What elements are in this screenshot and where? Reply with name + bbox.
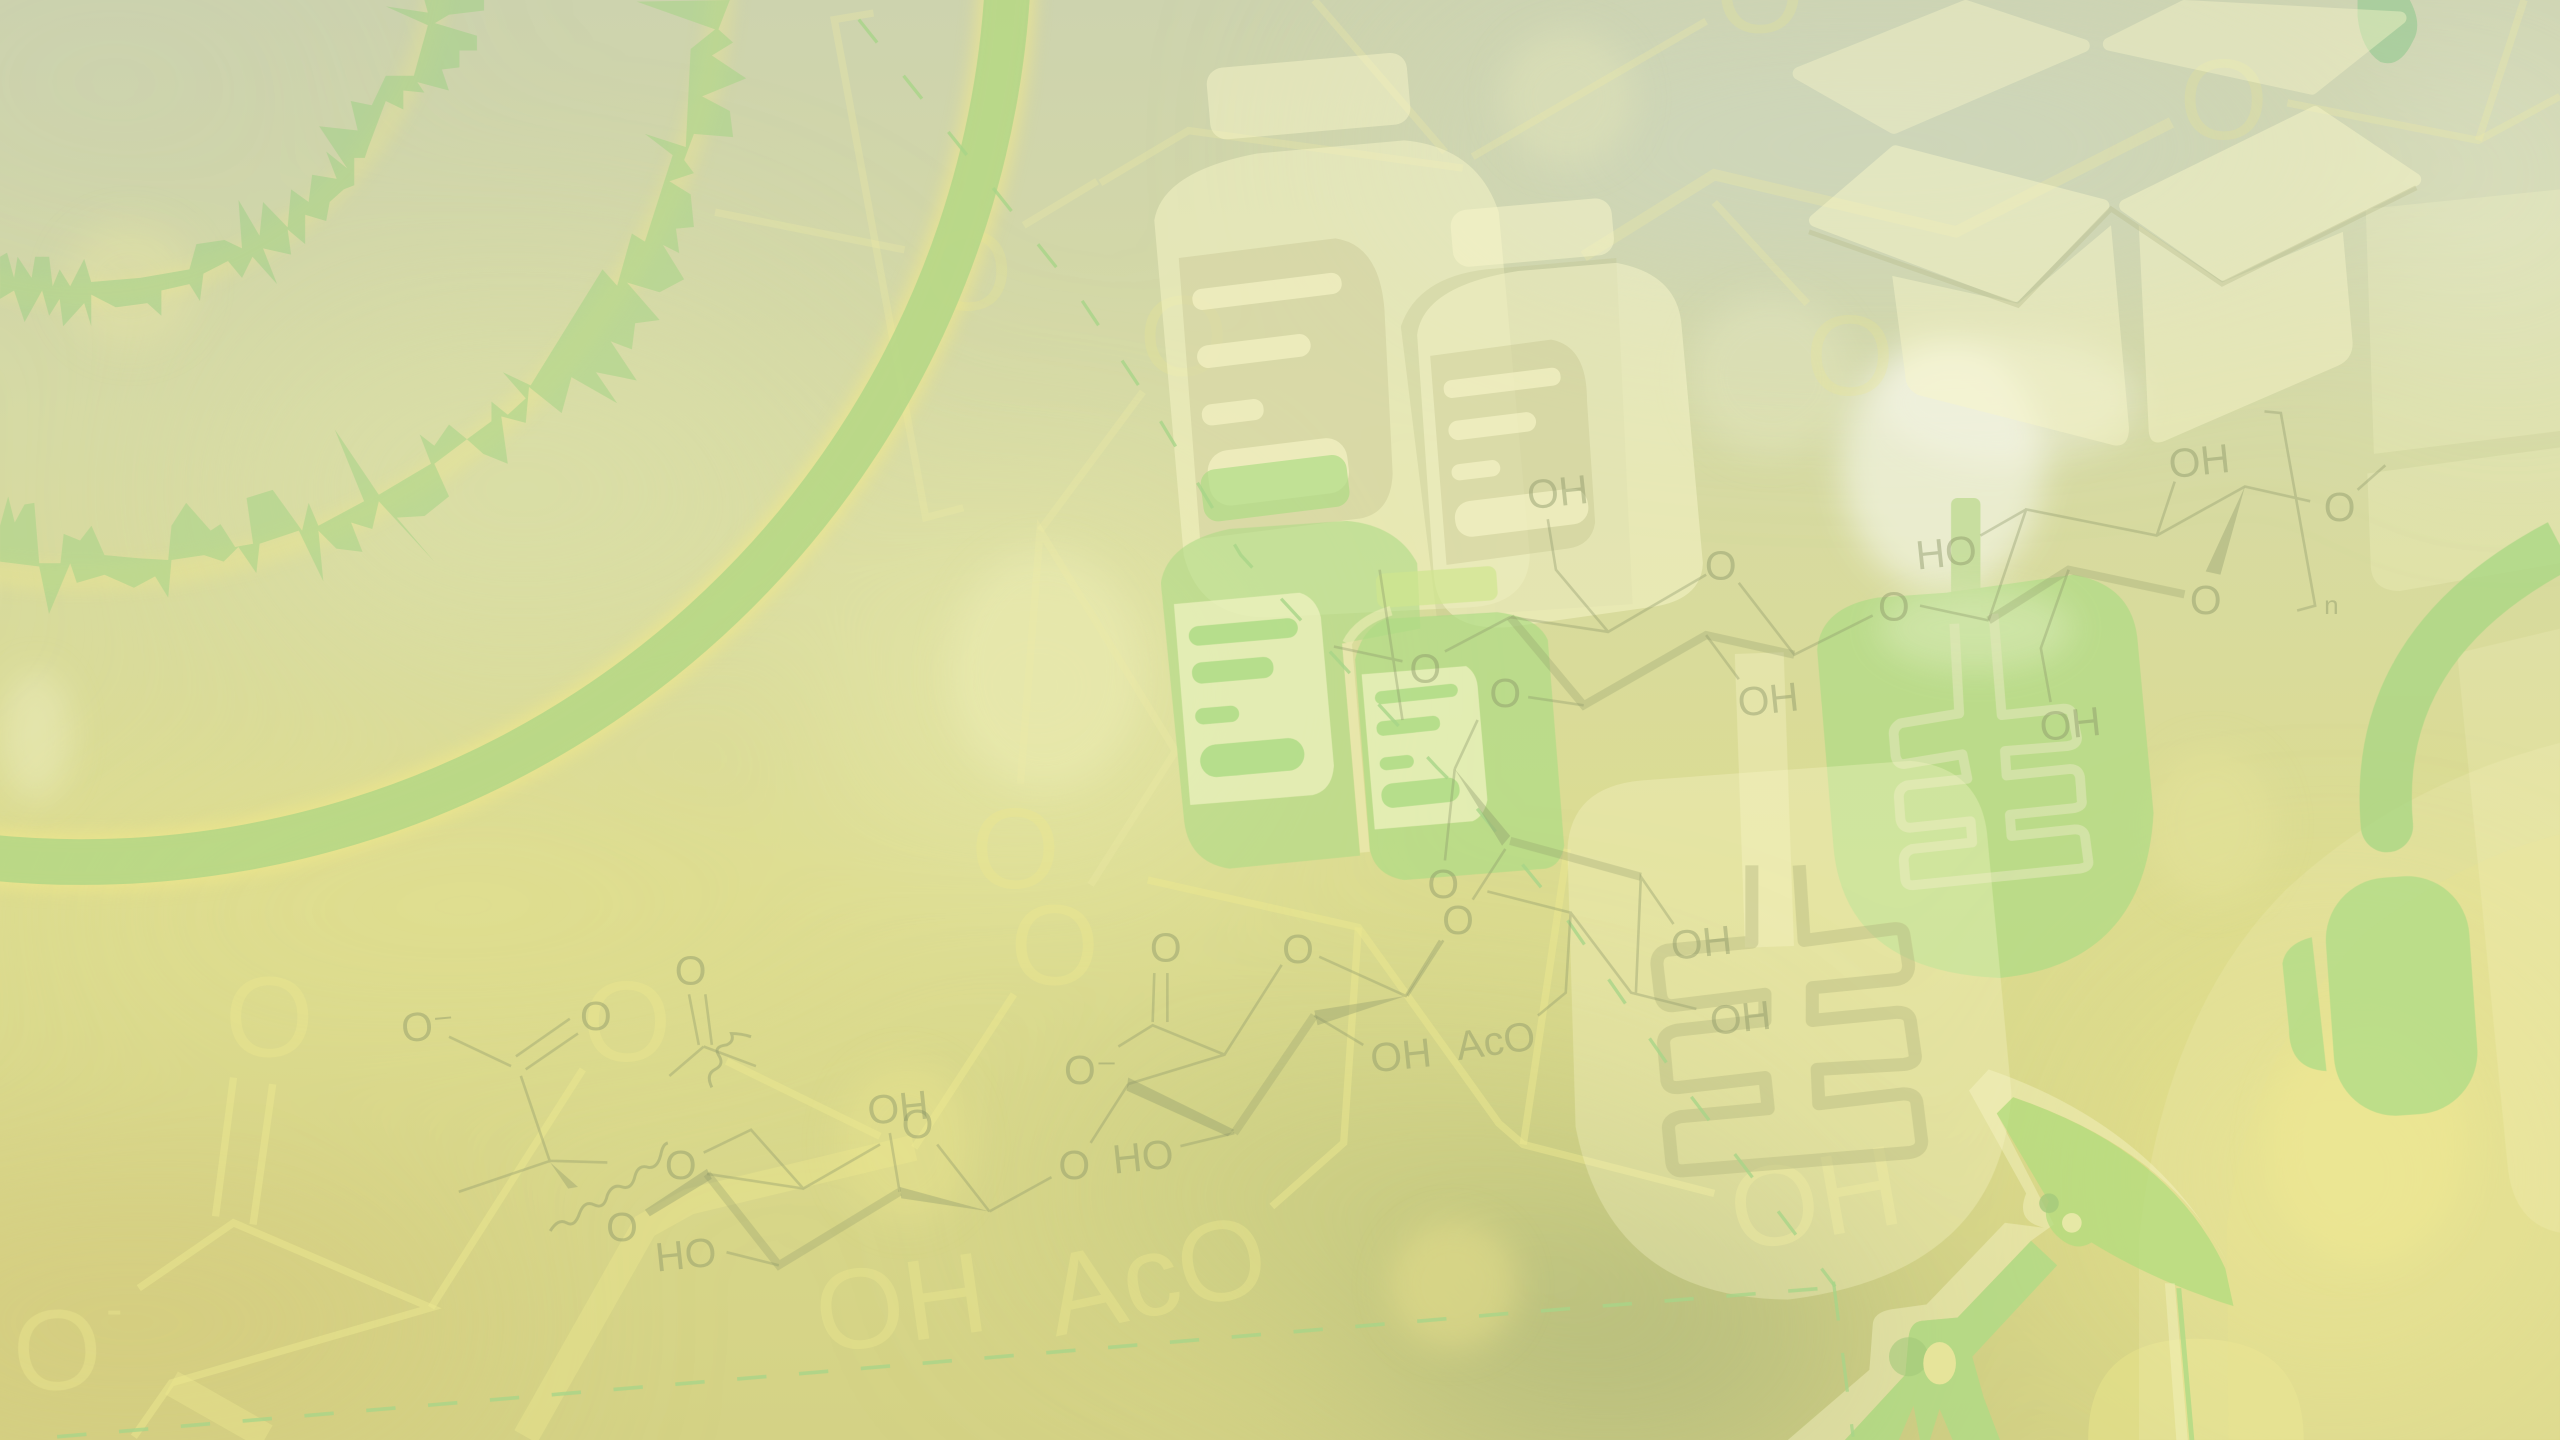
- box flap front left: [1816, 152, 2103, 296]
- small chemical labels: O: [1489, 670, 1521, 716]
- green capsule body: [1817, 575, 2153, 978]
- small chemical labels: O: [1150, 925, 1182, 971]
- bottle four body: [1355, 612, 1564, 880]
- box front left panel: [1892, 225, 2129, 446]
- small molecule chain, left unit: [449, 994, 1051, 1265]
- small molecule chain, upper middle unit: [1334, 519, 1873, 1016]
- bottle four label: [1362, 666, 1487, 829]
- large faint chemical labels: O: [582, 959, 671, 1086]
- headphones outer translucent arc: [2139, 743, 2560, 1440]
- box flap back left: [1799, 7, 2083, 127]
- bottle two cap: [1449, 197, 1615, 268]
- small chemical labels: O: [675, 947, 706, 993]
- small molecule chain, right unit: [1920, 411, 2385, 702]
- bottle three bars: [1188, 617, 1306, 778]
- small chemical labels: O⁻: [1064, 1047, 1117, 1093]
- small chemical labels: O: [1705, 543, 1737, 589]
- large faint chemical labels: AcO: [1035, 1191, 1278, 1361]
- small chemical labels: OH: [1368, 1029, 1434, 1081]
- dish pole green: [2176, 1288, 2194, 1440]
- capsule serpentine: [1657, 865, 1922, 1171]
- small chemical labels: O: [1427, 861, 1459, 907]
- large faint chemical labels: O: [971, 786, 1060, 913]
- green bottle three: [1161, 521, 1420, 869]
- bottle one green bar: [1199, 453, 1351, 523]
- bottle two label: [1430, 340, 1595, 565]
- small chemical labels: OH: [2166, 435, 2232, 487]
- small chemical labels: OH: [2037, 698, 2103, 750]
- headphones icon: [2139, 545, 2560, 1440]
- dish arm: [1845, 1241, 2057, 1440]
- dashed green guide lines: [57, 20, 1853, 1437]
- bottle one label: [1179, 238, 1393, 539]
- bottle three body: [1161, 521, 1420, 869]
- satellite dish icon: [1788, 1069, 2233, 1440]
- bottle one body: [1154, 140, 1530, 617]
- inner waveform ring: [0, 0, 484, 326]
- large faint chemical labels: O: [1805, 293, 1894, 420]
- dish pole cream: [2165, 1283, 2188, 1440]
- outer waveform ring: [0, 0, 746, 614]
- bottle three label: [1174, 593, 1334, 805]
- small chemical labels: OH: [1708, 992, 1773, 1044]
- small chemical labels: HO: [1110, 1131, 1176, 1183]
- cream capsule with serpentine: [1567, 652, 2011, 1300]
- dish arm joint: [1923, 1342, 1956, 1384]
- bottle one bars: [1191, 272, 1351, 508]
- top right bottle shape: [2358, 0, 2560, 591]
- small chemical labels: O: [1442, 897, 1474, 943]
- capsule body: [1567, 761, 2011, 1300]
- large faint chemical labels: OH: [807, 1229, 995, 1378]
- box front right panel: [2139, 225, 2353, 442]
- small chemical labels: OH: [1668, 917, 1734, 969]
- bottle four bars: [1374, 683, 1461, 809]
- bottom right light disc: [2088, 1339, 2304, 1440]
- small chemical labels: AcO: [1453, 1012, 1538, 1069]
- headphones band: [2361, 545, 2560, 852]
- small chemical labels: O: [606, 1204, 638, 1250]
- dish hinge dot: [2039, 1193, 2059, 1213]
- concentric ring: [0, 0, 1009, 862]
- box flap back right: [2109, 7, 2400, 88]
- bottle two body: [1417, 263, 1703, 628]
- small chemical labels: O: [902, 1101, 933, 1147]
- large faint chemical labels: O: [9, 1284, 106, 1417]
- small chemical labels: O: [2190, 577, 2222, 623]
- small chemical labels: [399, 435, 2355, 1281]
- open box icon: [1799, 7, 2416, 446]
- large faint chemical labels: O: [1010, 882, 1099, 1009]
- small chemical labels: O: [1282, 926, 1314, 972]
- small chemical labels: OH: [865, 1082, 931, 1134]
- dish arm dark joint: [1889, 1337, 1928, 1376]
- bottle two back outline: [1401, 258, 1633, 617]
- small chemical labels: OH: [1525, 466, 1590, 518]
- large faint chemical labels: O: [2179, 37, 2268, 164]
- small chemical labels: O: [1058, 1142, 1090, 1188]
- green capsule light area: [1878, 586, 2073, 671]
- small chemical labels: O: [1409, 645, 1441, 691]
- bottle two bars: [1443, 367, 1590, 539]
- headphones right panel: [2457, 629, 2560, 1233]
- box flap front right: [2126, 113, 2415, 274]
- green bottle four: [1347, 566, 1564, 880]
- small chemical labels: HO: [653, 1228, 719, 1281]
- bottle two: [1401, 197, 1703, 628]
- headphones ear cup: [2322, 872, 2482, 1120]
- small chemical labels: O: [1878, 583, 1910, 629]
- large faint chemical labels: O: [225, 954, 314, 1081]
- large faint chemical labels: OH: [1720, 1122, 1911, 1276]
- small chemical labels: n: [2324, 590, 2339, 620]
- large faint chemical labels: O: [924, 208, 1013, 335]
- bottle four outline: [1347, 611, 1391, 852]
- bottle one cap: [1205, 52, 1412, 141]
- dish reflector: [1997, 1097, 2233, 1306]
- headphones inner translucent arc: [2227, 834, 2560, 1440]
- bottle one: [1154, 52, 1530, 617]
- small chemical labels: O: [665, 1142, 697, 1188]
- capsule stem: [1735, 652, 1794, 948]
- dish hinge hole: [2062, 1213, 2082, 1233]
- large faint chemical labels: -: [106, 1283, 122, 1337]
- small chemical labels: O⁻: [399, 1001, 456, 1051]
- headphones ear pad: [2282, 937, 2327, 1071]
- small molecule chain, middle unit: [1091, 940, 1440, 1146]
- green capsule serpentine: [1894, 614, 2088, 885]
- green capsule stem: [1951, 498, 1980, 629]
- green capsule with serpentine: [1817, 498, 2153, 978]
- bottle four cap: [1375, 566, 1498, 608]
- small chemical labels: OH: [1735, 673, 1801, 726]
- dish cream backing: [1788, 1069, 2229, 1440]
- small chemical labels: O: [580, 993, 612, 1039]
- large faint chemical labels: O: [1139, 274, 1228, 401]
- concentric ring glow: [0, 0, 1009, 862]
- small chemical labels: O: [2324, 484, 2355, 530]
- small chemical labels: HO: [1913, 526, 1979, 579]
